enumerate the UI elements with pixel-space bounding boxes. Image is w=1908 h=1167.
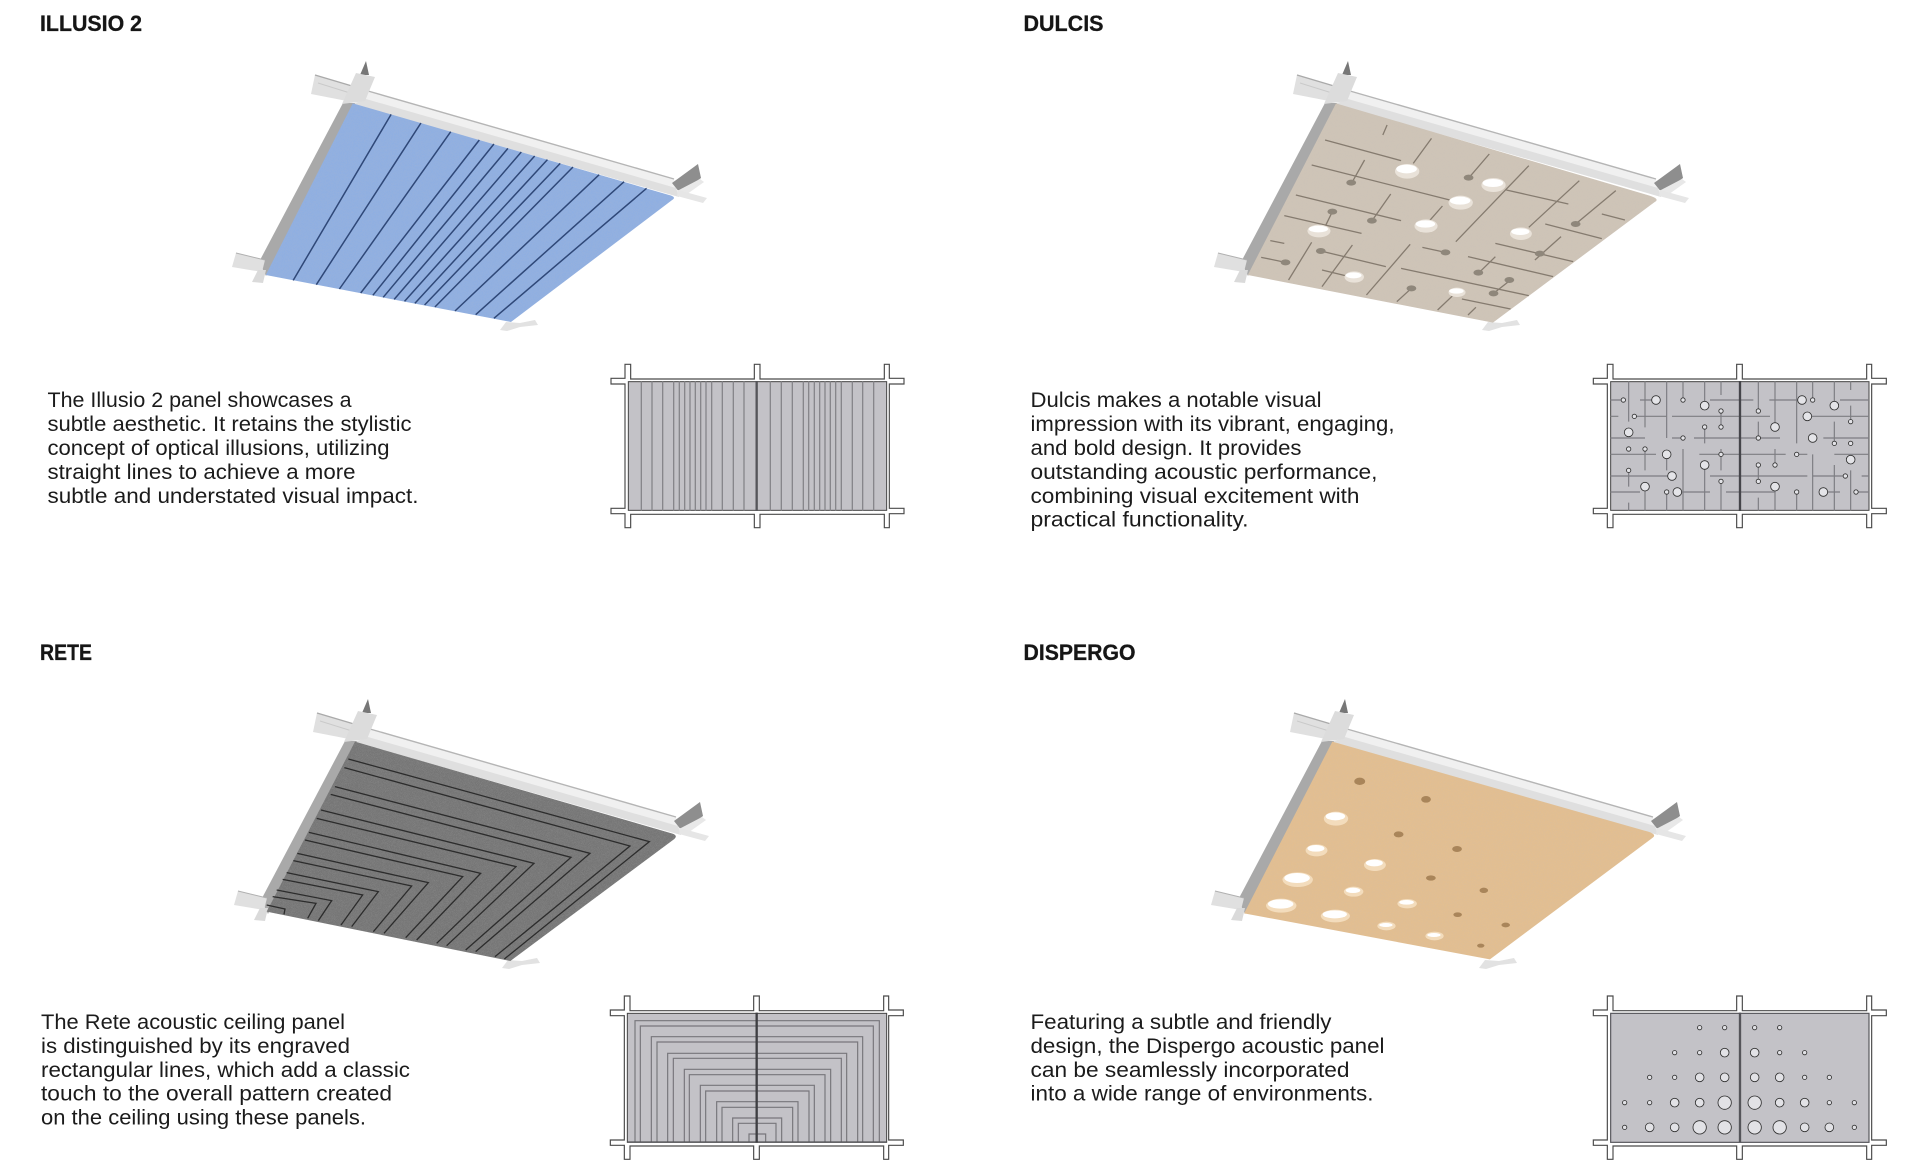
description: Dispergo: can be seamlessly incorporated [1030,1059,1350,1082]
heading: Illusio 2: ILLUSIO 2 [40,11,142,36]
blue panel surface [266,103,674,322]
grey panel surface [267,742,676,961]
3D view: Dulcis ceiling panel [1214,61,1689,331]
description: Rete: touch to the overall pattern created [41,1082,392,1106]
description: Illusio 2: straight lines to achieve a more [48,461,356,484]
description: Dulcis: Dulcis makes a notable visual [1030,389,1322,412]
plan view: Rete [610,996,903,1159]
description: Illusio 2: subtle and understated visual impact. [48,485,418,508]
description: Rete [41,1011,410,1130]
beige panel surface [1248,103,1657,323]
description: Illusio 2: The Illusio 2 panel showcases a [48,389,352,412]
3D view: Illusio 2 ceiling panel [232,61,707,331]
description: Dulcis: impression with its vibrant, engaging, [1030,413,1394,436]
description: Illusio 2: concept of optical illusions, utilizing [48,437,390,460]
description: Dulcis [1030,389,1394,532]
description: Dulcis: and bold design. It provides [1030,437,1302,460]
description: Rete: on the ceiling using these panels. [41,1106,366,1130]
plan view: Dispergo [1593,996,1886,1159]
description: Dispergo [1030,1011,1384,1106]
plan view: Illusio 2 [611,364,904,528]
description: Dispergo: into a wide range of environments. [1030,1082,1374,1106]
heading: Dulcis: DULCIS [1024,11,1104,36]
description: Dulcis: combining visual excitement with [1030,485,1360,508]
heading: Dispergo: DISPERGO [1024,640,1136,665]
heading: Rete: RETE [40,640,92,665]
description: Illusio 2: subtle aesthetic. It retains the stylistic [48,413,412,436]
description: Dulcis: practical functionality. [1030,508,1248,532]
tan panel surface [1244,742,1654,959]
3D view: Dispergo ceiling panel [1211,699,1686,969]
description: Rete: is distinguished by its engraved [41,1035,350,1058]
3D view: Rete ceiling panel [234,699,709,969]
plan view: Dulcis [1593,364,1886,528]
description: Dispergo: Featuring a subtle and friendly [1030,1011,1332,1034]
description: Illusio 2 [48,389,418,508]
description: Dispergo: design, the Dispergo acoustic panel [1030,1035,1384,1058]
description: Dulcis: outstanding acoustic performance, [1030,461,1378,484]
description: Rete: The Rete acoustic ceiling panel [41,1011,345,1034]
description: Rete: rectangular lines, which add a classic [41,1059,410,1082]
